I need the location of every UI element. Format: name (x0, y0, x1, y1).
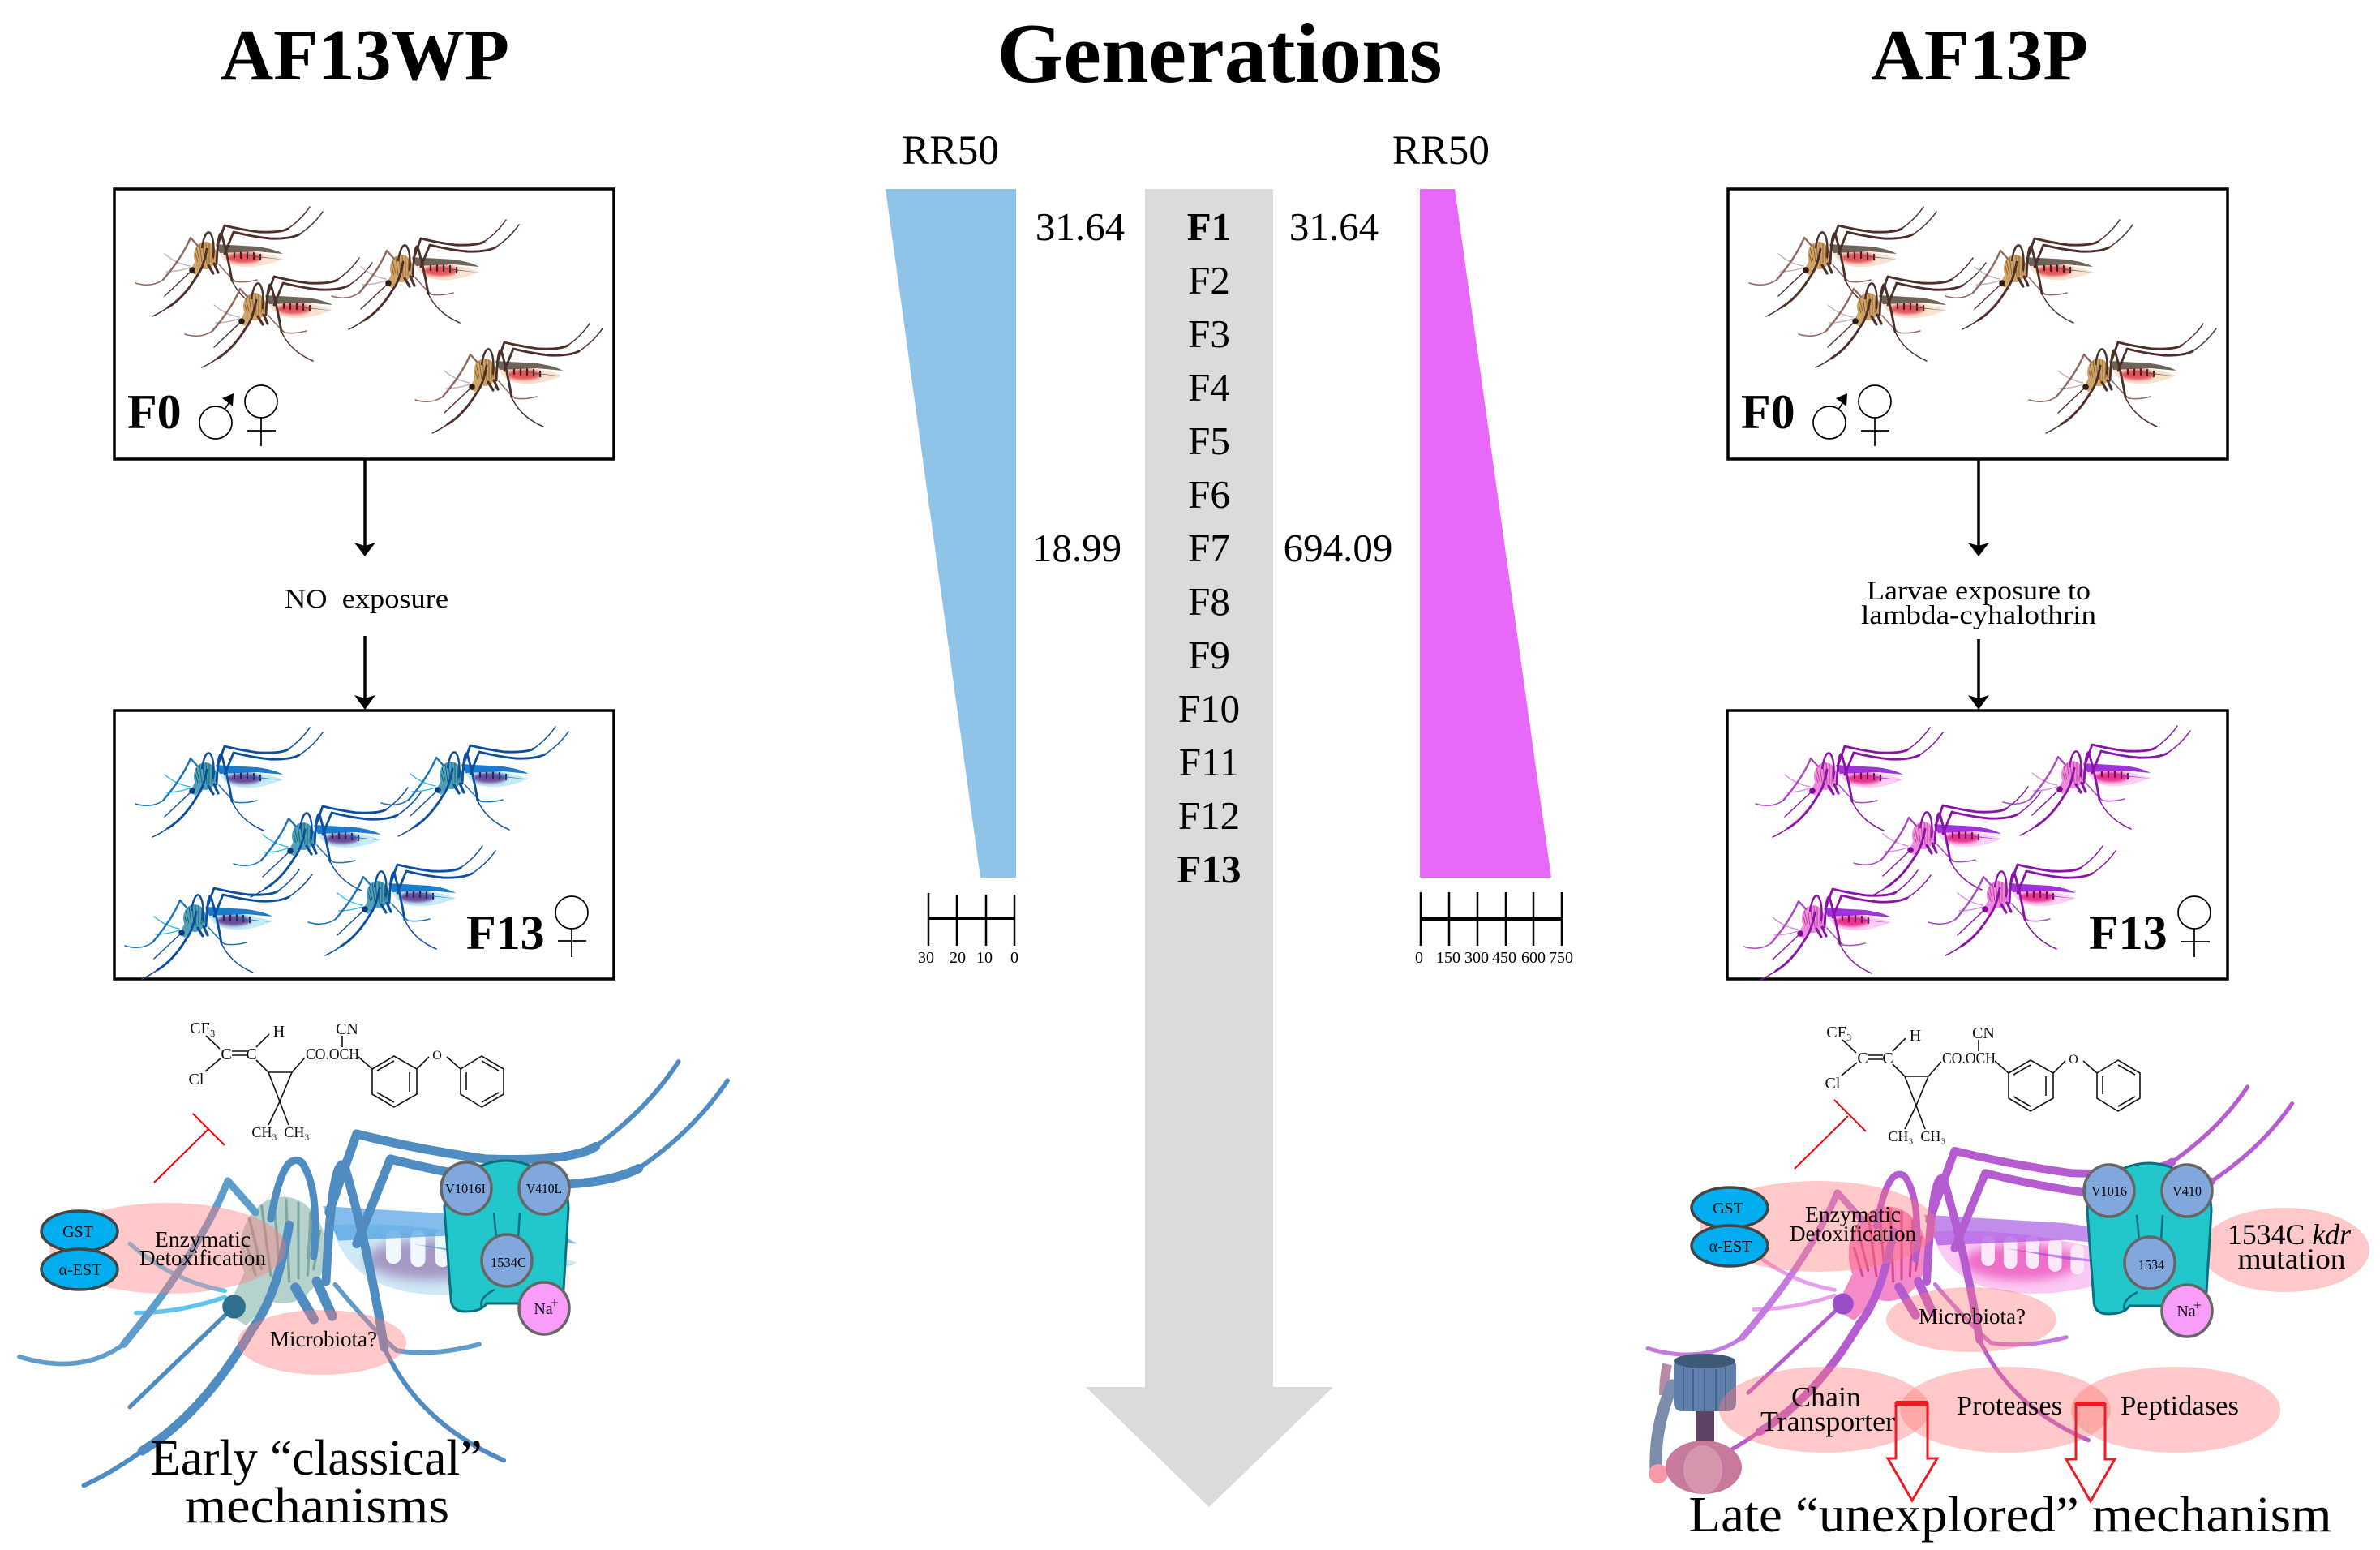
panel: left F0 mosquitoes (114, 189, 614, 459)
EST enzyme (1692, 1226, 1768, 1266)
EST enzyme: α-EST (59, 1261, 101, 1279)
panel: left F0 mosquitoes: F0 (127, 385, 182, 439)
chart: blue RR50 wedge (886, 189, 1016, 878)
panel: left F13 blue mosquitoes: F13 (466, 906, 545, 960)
motor protein transporter icon (1649, 1354, 1742, 1494)
sodium channel: Na (2176, 1303, 2196, 1320)
scale: right axis: 0 (1415, 949, 1423, 967)
sodium channel (2084, 1163, 2212, 1337)
arrow: red down 1 (1888, 1403, 1937, 1501)
chemical structure (1825, 1024, 2140, 1144)
big purple mosquito (1648, 1087, 2292, 1462)
panel: right F0 mosquitoes (1728, 189, 2228, 459)
RR50 values: 694.09 (1284, 526, 1392, 570)
scale: right axis (1415, 892, 1573, 967)
chemical structure: CO.OCH (306, 1045, 359, 1063)
arrow: left text to F13 (354, 636, 375, 710)
RR50 values: 18.99 (1032, 526, 1121, 570)
title: Generations: Generations (997, 6, 1442, 101)
text: larvae exposure: lambda-cyhalothrin (1861, 601, 2096, 630)
scale: left axis: 0 (1010, 949, 1018, 967)
kdr mutation oval (2201, 1208, 2369, 1292)
generation labels: F13 (1177, 847, 1241, 891)
chemical structure: C (1857, 1050, 1868, 1067)
GST enzyme: GST (62, 1223, 93, 1241)
chemical structure: CF₃ (190, 1020, 216, 1037)
generation labels: F11 (1179, 740, 1239, 784)
microbiota oval (1886, 1287, 2056, 1352)
chemical structure: CN (1972, 1024, 1995, 1042)
inhibition mark (1795, 1100, 1866, 1169)
scale: left axis: 20 (950, 949, 966, 967)
sodium channel: V1016I (445, 1181, 486, 1196)
generation labels: F3 (1188, 311, 1230, 356)
enzymatic detoxification oval: Enzymatic (1805, 1202, 1901, 1226)
chemical structure: CH₃ (251, 1124, 277, 1140)
title: AF13WP: AF13WP (221, 15, 509, 96)
caption: early mechanisms: Early “classical” (151, 1431, 482, 1486)
chemical structure: H (273, 1023, 285, 1041)
text: NO exposure: NO exposure (285, 585, 448, 614)
panel: right F13 purple mosquitoes (1727, 711, 2228, 980)
arrow: right F0 to text (1968, 459, 1989, 556)
arrow: left F0 to text (354, 459, 375, 556)
generation labels: F2 (1188, 258, 1230, 303)
RR50 values: 31.64 (1289, 204, 1379, 249)
enzymatic detoxification oval (49, 1203, 286, 1294)
title: AF13P: AF13P (1871, 15, 2088, 96)
peptidases oval: Peptidases (2121, 1391, 2239, 1421)
chemical structure (189, 1020, 504, 1140)
generation labels: F6 (1188, 472, 1230, 517)
proteases oval (1900, 1367, 2111, 1453)
generation labels: F8 (1188, 579, 1230, 624)
RR50 values: 31.64 (1036, 204, 1125, 249)
sodium channel: V1016 (2091, 1183, 2127, 1199)
panel: left F13 blue mosquitoes (114, 711, 614, 979)
sodium channel (441, 1161, 569, 1334)
chemical structure: Cl (189, 1071, 204, 1088)
enzymatic detoxification oval: Detoxification (1790, 1222, 1916, 1246)
chain transporter oval (1719, 1367, 1930, 1453)
chemical structure: CH₃ (1920, 1128, 1946, 1144)
generation labels: F5 (1188, 419, 1230, 463)
text: larvae exposure (1861, 577, 2096, 630)
panel: right F13 purple mosquitoes: F13 (2089, 906, 2168, 960)
arrow: right text to F13 (1968, 639, 1989, 710)
GST enzyme (1692, 1187, 1768, 1228)
panel: left mechanisms (19, 1020, 727, 1534)
chemical structure: C (221, 1045, 232, 1063)
microbiota oval: Microbiota? (270, 1327, 377, 1351)
RR50 values (1032, 204, 1392, 570)
chemical structure: CN (336, 1020, 358, 1038)
scale: left axis: 10 (976, 949, 993, 967)
GST enzyme (41, 1211, 118, 1252)
generation labels: F1 (1187, 204, 1231, 249)
chemical structure: O (432, 1049, 442, 1063)
panel: right mechanisms (1648, 1024, 2369, 1543)
enzymatic detoxification oval (1700, 1181, 1936, 1272)
sodium channel: + (2193, 1297, 2202, 1313)
sodium channel: 1534C (491, 1255, 526, 1270)
generation labels (1177, 204, 1241, 891)
RR50 label right: RR50 (1392, 128, 1490, 174)
generation labels: F4 (1188, 365, 1230, 410)
EST enzyme: α-EST (1709, 1238, 1752, 1256)
chemical structure: Cl (1825, 1075, 1841, 1093)
enzymatic detoxification oval: Detoxification (139, 1246, 266, 1270)
arrow: red down 2 (2066, 1404, 2115, 1501)
scale: left axis: 30 (918, 949, 934, 967)
chemical structure: H (1910, 1027, 1921, 1045)
chemical structure: CH₃ (284, 1124, 310, 1140)
sodium channel: + (551, 1295, 559, 1311)
big blue mosquito (19, 1062, 727, 1485)
sodium channel: V410 (2172, 1183, 2202, 1199)
generation labels: F7 (1188, 526, 1230, 570)
microbiota oval: Microbiota? (1919, 1304, 2026, 1329)
chemical structure: CF₃ (1826, 1024, 1852, 1041)
scale: left axis (918, 893, 1018, 967)
sodium channel: 1534 (2138, 1257, 2164, 1273)
generation labels: F9 (1188, 633, 1230, 677)
chain transporter oval: Chain (1791, 1381, 1861, 1413)
scale: right axis: 450 (1492, 949, 1516, 967)
panel: right F0 mosquitoes: F0 (1741, 385, 1795, 439)
sodium channel: Na (534, 1300, 553, 1318)
scale: right axis: 600 (1521, 949, 1546, 967)
chemical structure: C (1882, 1050, 1893, 1067)
peptidases oval (2071, 1367, 2280, 1453)
GST enzyme: GST (1713, 1200, 1743, 1217)
scale: right axis: 750 (1549, 949, 1573, 967)
generation labels: F10 (1178, 686, 1240, 731)
text: larvae exposure: Larvae exposure to (1867, 577, 2091, 606)
kdr mutation label: 1534C kdr (2228, 1218, 2352, 1251)
caption: late mechanism: Late “unexplored” mechanism (1688, 1488, 2332, 1543)
inhibition mark (154, 1114, 225, 1183)
chemical structure: CO.OCH (1942, 1050, 1996, 1067)
generation labels: F12 (1178, 793, 1240, 838)
enzymatic detoxification oval: Enzymatic (155, 1227, 251, 1252)
chemical structure: O (2069, 1053, 2078, 1067)
arrow: grey generations arrow (1086, 189, 1333, 1507)
chemical structure: C (246, 1045, 257, 1063)
scale: right axis: 150 (1436, 949, 1460, 967)
kdr mutation label (2228, 1218, 2352, 1275)
microbiota oval (238, 1310, 406, 1375)
chain transporter oval: Transporter (1760, 1406, 1895, 1437)
kdr mutation label: mutation (2238, 1243, 2345, 1275)
sodium channel: V410L (526, 1181, 562, 1196)
scale: right axis: 300 (1464, 949, 1489, 967)
EST enzyme (41, 1249, 118, 1290)
caption: early mechanisms: mechanisms (185, 1479, 449, 1534)
proteases oval: Proteases (1957, 1391, 2062, 1421)
RR50 label left: RR50 (902, 128, 999, 174)
chemical structure: CH₃ (1888, 1128, 1914, 1144)
caption: early mechanisms (151, 1431, 482, 1534)
chart: magenta RR50 wedge (1420, 189, 1551, 878)
